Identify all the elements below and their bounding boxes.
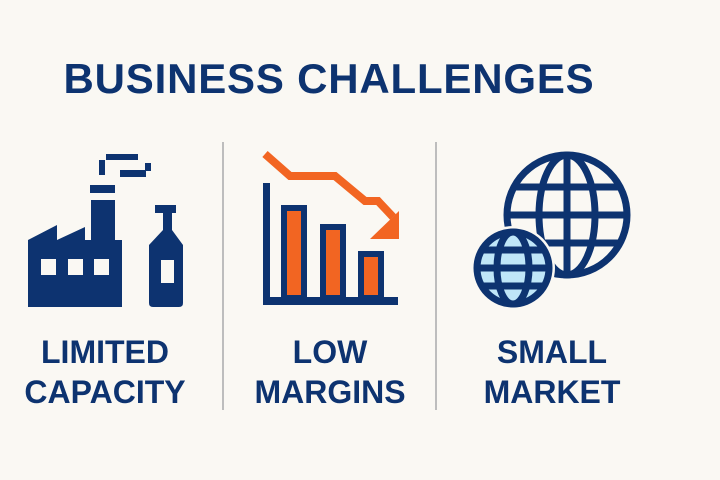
label: low margins: LOW <box>293 334 367 370</box>
label: small market: SMALL <box>497 334 607 370</box>
label: small market: MARKET <box>484 374 620 410</box>
label: limited capacity: LIMITED <box>41 334 169 370</box>
icon: bottle <box>149 205 183 307</box>
icon: factory <box>28 154 151 307</box>
chart: declining bars <box>263 154 399 305</box>
arrow: downward trend <box>265 154 399 239</box>
label: limited capacity: CAPACITY <box>24 374 186 410</box>
label: small market <box>484 334 620 410</box>
icon: globes <box>471 155 627 310</box>
label: limited capacity <box>24 334 186 410</box>
label: low margins: MARGINS <box>254 374 406 410</box>
label: low margins <box>254 334 406 410</box>
title: BUSINESS CHALLENGES <box>64 55 594 102</box>
